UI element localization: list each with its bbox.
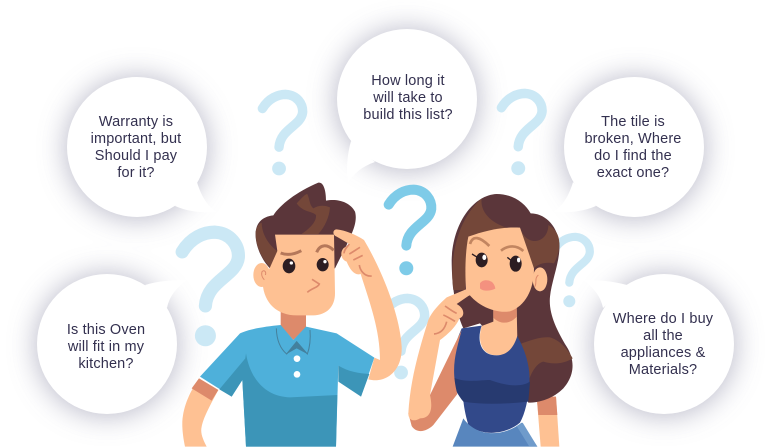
woman: ear <box>533 267 547 291</box>
woman: hair <box>452 194 573 403</box>
question mark: upper left <box>262 94 303 175</box>
text: oven question: Is this Oven <box>67 322 145 338</box>
woman: raised arm and hand <box>408 288 473 431</box>
text: warranty question: for it? <box>117 165 155 181</box>
man: neck <box>281 310 306 340</box>
question mark: large left <box>182 232 238 346</box>
text: list question: How long it <box>371 73 445 89</box>
speech bubble: warranty <box>67 77 217 217</box>
text: tile question: broken, Where <box>584 131 682 147</box>
woman: skirt <box>453 418 537 447</box>
woman: back arm <box>537 397 559 447</box>
man: face <box>263 235 335 315</box>
speech bubble: list <box>337 29 477 183</box>
man: eyebrows <box>281 246 334 254</box>
man: shirt <box>200 325 374 447</box>
text: appliances question: all the <box>643 328 683 344</box>
text: warranty question: Warranty is <box>99 114 173 130</box>
text: oven question: will fit in my <box>67 339 145 355</box>
text: list question: will take to <box>372 90 443 106</box>
man: ear <box>253 263 270 287</box>
woman: face <box>465 227 534 312</box>
woman: mouth <box>480 280 495 291</box>
bubble shadows <box>36 29 735 416</box>
question mark: upper right <box>501 93 542 175</box>
woman: neck and chest <box>480 307 517 355</box>
text: appliances question: Materials? <box>629 362 697 378</box>
text: tile question: The tile is <box>601 114 665 130</box>
question mark: lower centre <box>384 298 425 379</box>
question mark: centre dark <box>389 190 431 275</box>
man: raised arm and hand <box>333 229 402 380</box>
woman: dress <box>451 326 530 433</box>
man: left arm <box>182 378 218 447</box>
text: tile question: do I find the <box>594 148 672 164</box>
text: warranty question: Should I pay <box>95 148 178 164</box>
text: oven question: kitchen? <box>78 356 134 372</box>
woman: eyebrows <box>470 238 523 251</box>
text: tile question: exact one? <box>597 165 669 181</box>
text: appliances question: Where do I buy <box>613 311 714 327</box>
text: list question: build this list? <box>363 107 453 123</box>
speech bubble: oven <box>37 274 187 414</box>
woman: eyes <box>472 253 522 272</box>
text: appliances question: appliances & <box>621 345 706 361</box>
speech bubble: appliances <box>583 274 734 414</box>
man: hair <box>256 183 356 268</box>
man: eyes <box>283 258 329 273</box>
woman figure <box>408 194 573 447</box>
man: nose and mouth <box>307 279 319 292</box>
man: buttons <box>294 355 300 378</box>
question mark: right small <box>555 237 590 307</box>
man figure <box>182 183 402 447</box>
man: collar <box>276 328 310 354</box>
speech bubble: tile <box>553 77 704 217</box>
text: warranty question: important, but <box>91 131 181 147</box>
